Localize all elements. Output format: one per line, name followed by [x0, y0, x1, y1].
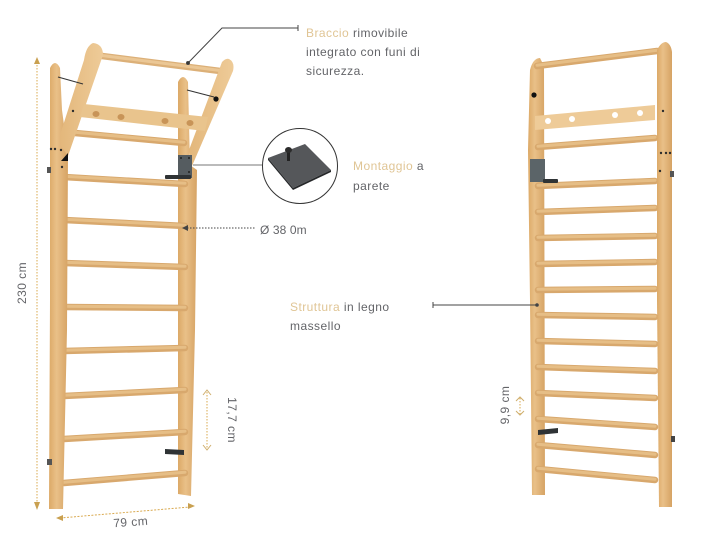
left ladder far upright	[178, 77, 197, 496]
mounting plate	[268, 144, 331, 188]
left joint hardware	[47, 110, 74, 465]
callout text: structure: massello	[290, 319, 341, 333]
callout text: structure: Struttura in legno	[290, 300, 390, 314]
callout text: wall mount: parete	[353, 179, 390, 193]
right ladder rungs	[537, 50, 657, 480]
arm crossbar with holes	[80, 104, 208, 131]
callout text: wall mount: Montaggio a	[353, 159, 424, 173]
callout line: structure	[433, 302, 538, 308]
arm side right	[189, 59, 234, 166]
wall bracket lower	[165, 449, 184, 455]
upper bar of the arm	[102, 56, 228, 72]
plate knob	[287, 152, 290, 161]
right ladder right upright	[657, 42, 672, 507]
left ladder rungs	[64, 132, 185, 483]
right lower bracket	[538, 428, 558, 435]
dimension: width 79 cm	[56, 503, 195, 530]
dimension: rung spacing 17,7 cm	[203, 390, 239, 450]
right crossbar with holes	[535, 105, 655, 130]
dimension: rung spacing 9,9 cm: 9,9 cm	[498, 386, 512, 424]
dimension: rung spacing 9,9 cm	[498, 386, 524, 424]
callout line: arm	[186, 25, 298, 64]
safety cords	[58, 77, 219, 102]
wall bracket upper	[165, 155, 192, 179]
dimension: rung spacing 17,7 cm: 17,7 cm	[225, 397, 239, 443]
left wall bars with arm	[47, 43, 234, 509]
right wall bars	[528, 42, 675, 507]
right ladder left upright	[528, 58, 545, 495]
arm side left	[60, 43, 103, 156]
callout line: wall mount	[193, 164, 262, 166]
callout text: arm: Braccio rimovibile	[306, 26, 408, 40]
callout line: rung diameter	[182, 225, 255, 231]
diameter label: Ø 38 0m	[260, 223, 307, 237]
dimension: height 230 cm	[15, 57, 40, 510]
right upper bracket	[530, 159, 558, 183]
callout text: arm: integrato con funi di	[306, 45, 420, 59]
dimension: width 79 cm: 79 cm	[113, 514, 149, 530]
dimension: height 230 cm: 230 cm	[15, 262, 29, 304]
right ladder hardware	[531, 92, 675, 442]
left ladder near upright	[49, 63, 68, 509]
callout text: arm: sicurezza.	[306, 64, 365, 78]
wall mount detail circle	[262, 128, 338, 204]
